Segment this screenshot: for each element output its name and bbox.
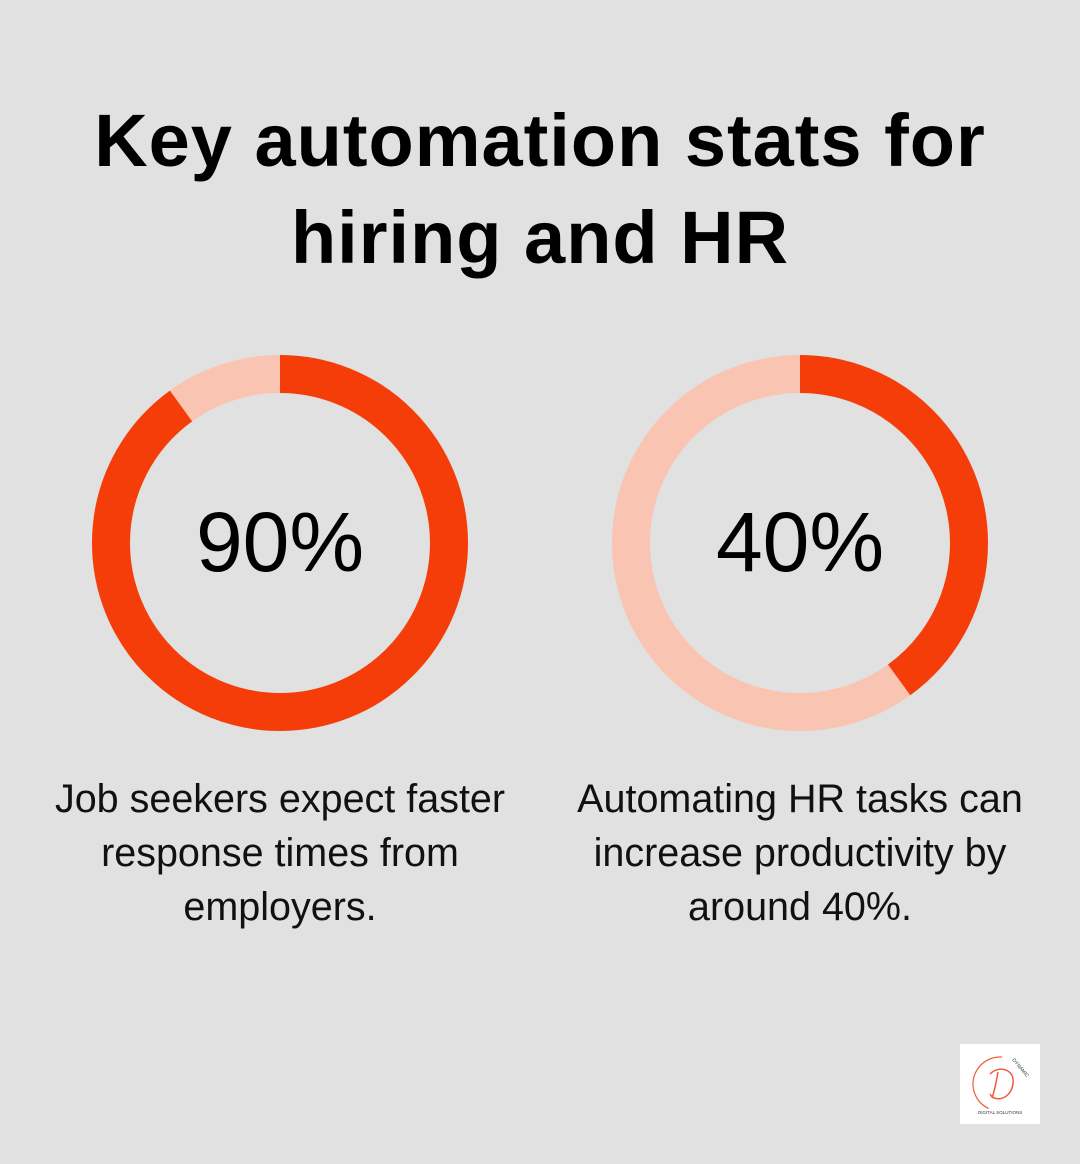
logo: DYNAMIC	[1010, 1057, 1030, 1079]
title	[94, 99, 986, 279]
donut chart: 40%: 40%	[716, 495, 884, 589]
donut chart: 90%	[92, 355, 468, 731]
logo: DIGITAL SOLUTIONS	[978, 1110, 1022, 1115]
logo	[960, 1044, 1040, 1124]
donut chart: 90%: 90%	[196, 495, 364, 589]
title: Key automation stats for	[94, 99, 986, 182]
donut chart: 40%	[612, 355, 988, 731]
title: hiring and HR	[291, 196, 789, 279]
caption: 40%: Automating HR tasks can increase productivity by around 40%.	[577, 777, 1023, 929]
caption: 90%: Job seekers expect faster response times from employers.	[55, 777, 505, 929]
